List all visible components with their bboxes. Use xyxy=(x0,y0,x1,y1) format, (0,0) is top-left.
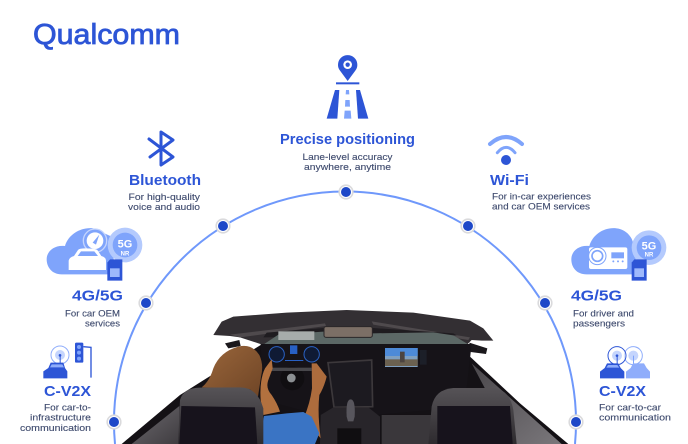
heading: 4G/5G right: 4G/5G xyxy=(571,288,622,304)
infotainment screen xyxy=(385,348,427,367)
icon: bluetooth xyxy=(149,132,173,165)
text: precise positioning description: Lane-level accuracy xyxy=(302,152,393,162)
text: C-V2X left description: infrastructure xyxy=(30,413,91,423)
text: precise positioning description: anywhere, anytime xyxy=(304,162,391,172)
instrument clusters xyxy=(269,345,319,362)
sensor strip xyxy=(278,331,314,340)
gear shift xyxy=(346,399,355,421)
icon: cloud dashboard 5G right: 5G xyxy=(642,240,656,252)
dash top xyxy=(263,332,470,345)
icon: cloud car 5G left: 5G xyxy=(118,239,132,251)
text: 4G/5G right description: For driver and xyxy=(573,309,634,319)
heading: C-V2X left: C-V2X xyxy=(44,383,91,400)
gear tunnel xyxy=(320,407,380,444)
center console xyxy=(328,360,373,407)
seat right xyxy=(428,388,517,444)
icon: cloud dashboard 5G right xyxy=(571,228,666,281)
icon: car and traffic light xyxy=(43,343,91,378)
windshield header xyxy=(213,310,493,345)
text: wi-fi description: For in-car experiences xyxy=(492,192,592,202)
heading: bluetooth: Bluetooth xyxy=(129,172,201,189)
icon: two cars xyxy=(600,347,650,378)
dashboard xyxy=(261,344,472,415)
text: bluetooth description: For high-quality xyxy=(128,192,201,202)
side mirrors xyxy=(225,340,487,354)
text: C-V2X right description: communication xyxy=(599,413,671,423)
steering wheel xyxy=(268,366,312,390)
car body sides xyxy=(122,343,568,444)
heading: wi-fi: Wi-Fi xyxy=(490,172,529,189)
text: C-V2X left description: For car-to- xyxy=(44,403,91,413)
text: 4G/5G right description: passengers xyxy=(573,319,626,329)
heading: 4G/5G left: 4G/5G xyxy=(72,288,123,304)
mirror xyxy=(324,327,372,337)
seat left xyxy=(178,387,263,444)
car photo xyxy=(122,310,568,444)
node dots xyxy=(107,185,583,429)
heading: C-V2X right: C-V2X xyxy=(599,383,646,400)
icon: cloud dashboard 5G right: NR xyxy=(645,253,654,259)
text: C-V2X left description: communication xyxy=(20,423,91,433)
icon: cloud car 5G left xyxy=(47,228,142,281)
sun visors xyxy=(230,321,470,340)
icon: cloud car 5G left: NR xyxy=(121,251,130,257)
text: 4G/5G left description: services xyxy=(85,319,121,329)
text: C-V2X right description: For car-to-car xyxy=(599,403,661,413)
text: 4G/5G left description: For car OEM xyxy=(65,309,120,319)
text: bluetooth description: voice and audio xyxy=(128,202,200,212)
logo: Qualcomm: Qualcomm xyxy=(33,19,180,51)
icon: positioning pin and road xyxy=(327,55,368,119)
driver arms xyxy=(260,359,280,415)
passenger seat cushion xyxy=(382,415,432,444)
icon: wi-fi xyxy=(490,137,522,165)
text: wi-fi description: and car OEM services xyxy=(492,202,591,212)
driver hair xyxy=(202,346,262,397)
arc connecting features xyxy=(114,192,576,444)
driver shirt xyxy=(258,412,319,444)
windshield opening xyxy=(263,328,457,337)
heading: precise positioning: Precise positioning xyxy=(280,131,415,148)
